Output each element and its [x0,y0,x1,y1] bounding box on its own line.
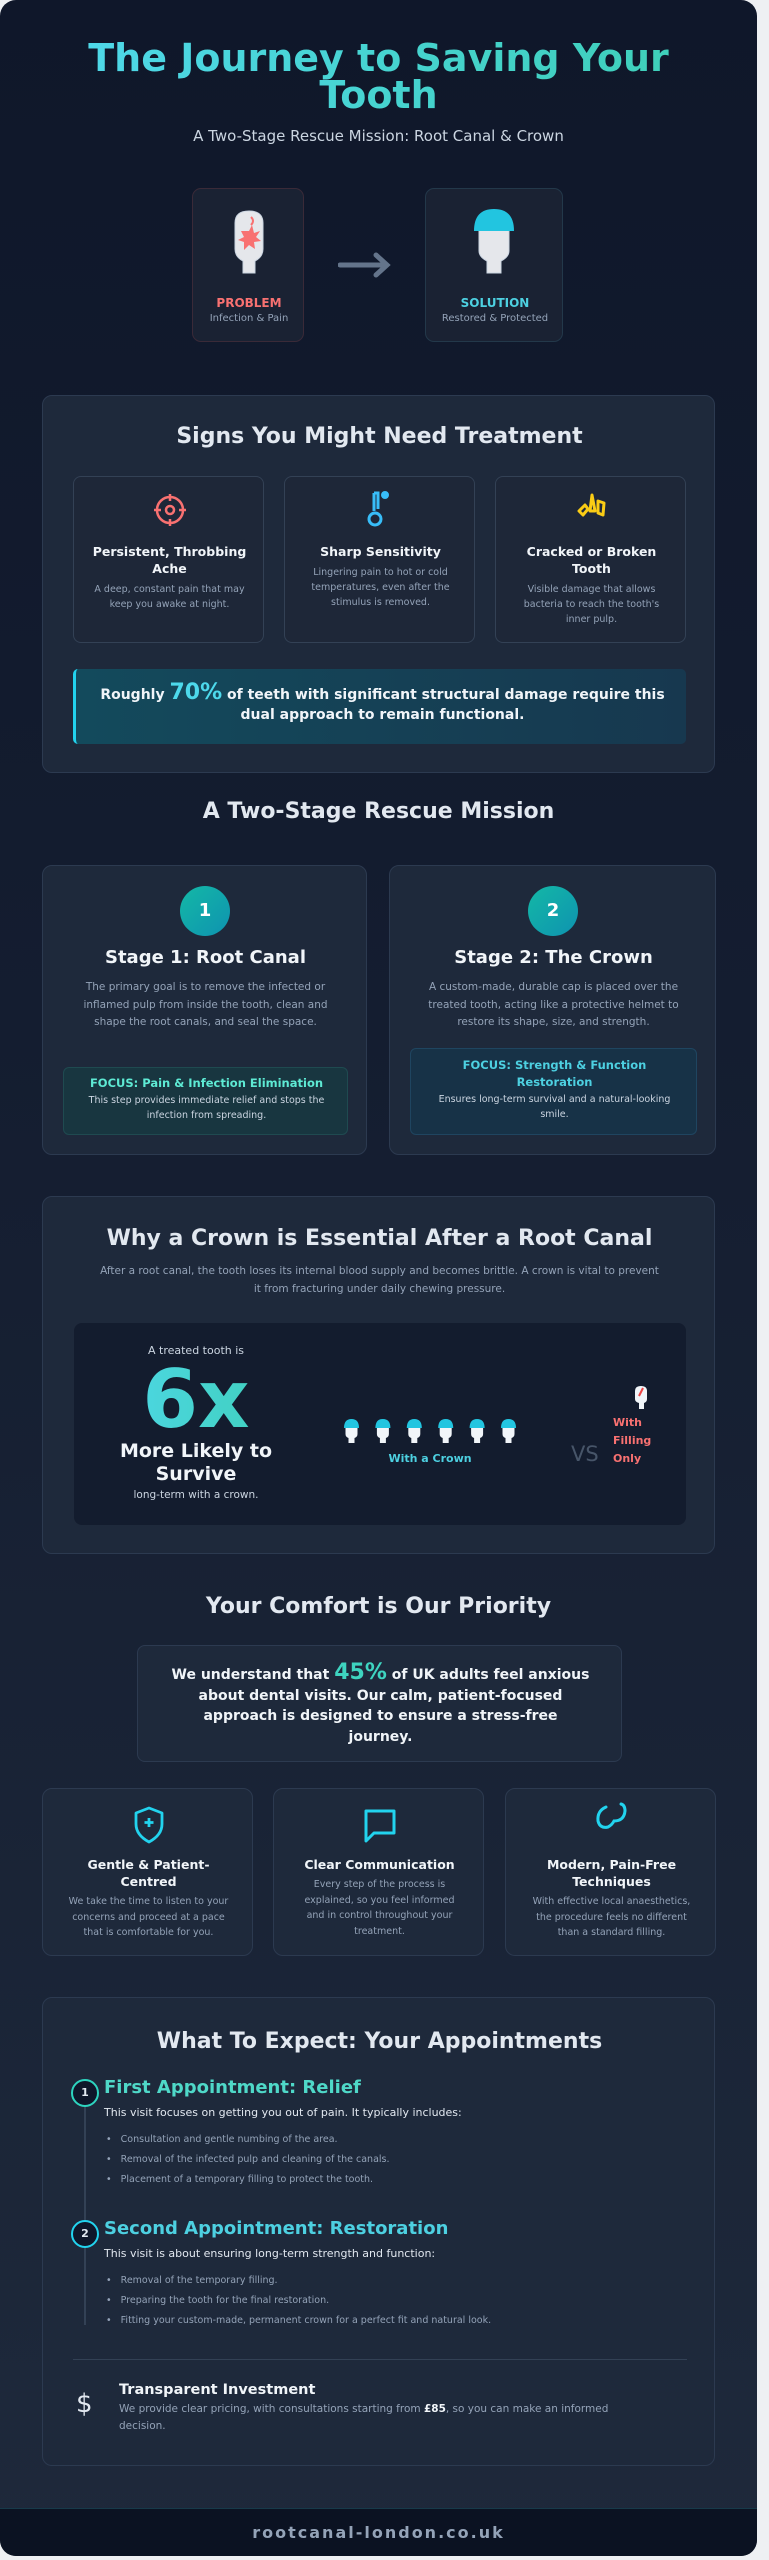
step 2: • Removal of the temporary filling. [106,2275,278,2286]
card: gentle: Gentle & Patient-Centred [87,1857,210,1889]
timeline line [84,2105,86,2325]
badge 1: 1 [199,900,211,921]
focus box 1: FOCUS: Pain & Infection Elimination [90,1076,323,1090]
focus box 2: FOCUS: Strength & Function Restoration [463,1058,646,1089]
stat box: With a Crown [388,1452,472,1465]
badge 2 [528,886,578,936]
focus box 2: Ensures long-term survival and a natural-looking smile. [439,1094,670,1120]
stat box: A treated tooth is [148,1344,244,1357]
callout: 70%: Roughly 70% of teeth with significant structural damage require this dual approach to remain functional. [100,680,665,723]
badge 2: 2 [547,900,559,921]
panel: appointments [42,1997,715,2466]
panel: why crown [42,1196,715,1554]
card: cracked [495,476,686,643]
vs: VS [571,1442,599,1466]
solution box [425,188,563,342]
heading: signs: Signs You Might Need Treatment [176,424,583,449]
panel: stage 2: Stage 2: The Crown [454,947,653,968]
step 1: First Appointment: Relief [104,2077,361,2098]
badge 1 [180,886,230,936]
footer: rootcanal-london.co.uk [252,2523,505,2542]
step 2 [71,2218,491,2326]
step 1: • Consultation and gentle numbing of the area. [106,2134,338,2145]
panel: stage 2: A custom-made, durable cap is placed over the treated tooth, acting like a protective helmet to restore its shape, size, and strength. [428,981,679,1028]
icon row: crowned teeth [344,1419,516,1443]
icon: filled tooth [635,1386,647,1409]
callout: 45% [137,1645,622,1762]
card: ache [73,476,264,643]
stat box [74,1323,686,1525]
heading: comfort: Your Comfort is Our Priority [206,1594,551,1619]
card: ache: Persistent, Throbbing Ache [93,544,246,576]
heading: two-stage: A Two-Stage Rescue Mission [203,799,554,824]
card: ache: A deep, constant pain that may keep you awake at night. [94,584,245,610]
panel: signs [42,395,715,773]
problem box: Infection & Pain [210,313,288,324]
subtitle: A Two-Stage Rescue Mission: Root Canal & Crown [193,127,564,145]
card: communication: Every step of the process is explained, so you feel informed and in control throughout your treatment. [304,1879,454,1936]
title: The Journey to Saving Your Tooth [88,36,669,117]
card: modern [505,1788,716,1956]
step 1: • Removal of the infected pulp and cleaning of the canals. [106,2154,390,2165]
icon: dollar: $ [76,2389,93,2419]
investment [76,2382,608,2432]
step 2: • Fitting your custom-made, permanent crown for a perfect fit and natural look. [106,2315,491,2326]
card: sensitivity: Lingering pain to hot or cold temperatures, even after the stimulus is removed. [311,567,450,608]
callout: 45%: We understand that 45% of UK adults feel anxious [172,1660,589,1685]
icon: crowned tooth [474,209,514,274]
stat: 6x: 6x [142,1353,250,1446]
panel: stage 2 [389,865,716,1155]
card: gentle [42,1788,253,1956]
label: solution: SOLUTION [461,296,529,310]
icon: curved tool [596,1802,626,1829]
stat box: long-term with a crown. [134,1489,258,1501]
step 1: • Placement of a temporary filling to protect the tooth. [106,2174,373,2185]
focus box 1: This step provides immediate relief and stops the infection from spreading. [89,1095,324,1121]
footer [0,2508,757,2556]
stat: 6x [94,1355,298,1445]
callout: 45%: about dental visits. Our calm, patient-focused [199,1688,562,1704]
icon: target [154,494,186,526]
step 1: 1 [81,2086,89,2099]
focus box 2 [410,1048,697,1135]
panel: appointments: What To Expect: Your Appointments [157,2029,602,2054]
step 2: This visit is about ensuring long-term strength and function: [104,2247,435,2260]
callout: 70% [73,669,686,744]
panel: why crown: After a root canal, the tooth loses its internal blood supply and becomes brittle. A crown is vital to prevent it from fracturing under daily chewing pressure. [100,1265,659,1295]
step 2: • Preparing the tooth for the final restoration. [106,2295,329,2306]
stat box: With Filling Only [613,1416,651,1465]
stat box: More Likely to Survive [120,1440,272,1485]
card: communication: Clear Communication [304,1857,455,1872]
card: gentle: We take the time to listen to your concerns and proceed at a pace that is comfortable for you. [69,1896,228,1938]
panel: why crown: Why a Crown is Essential After a Root Canal [107,1226,652,1251]
solution box: Restored & Protected [442,313,548,324]
icon: thermometer [368,491,389,526]
card: communication [273,1788,484,1956]
icon: infected tooth [234,210,264,274]
step 2: 2 [81,2227,89,2240]
panel: stage 1 [42,865,367,1155]
card: cracked: Visible damage that allows bacteria to reach the tooth's inner pulp. [524,584,659,625]
investment: Transparent Investment [119,2382,315,2398]
card: modern: With effective local anaesthetics, the procedure feels no different than a standard filling. [533,1896,690,1938]
callout: 45%: journey. [349,1728,412,1744]
icon: shield [134,1806,164,1844]
card: sensitivity [284,476,475,643]
icon: cracked tooth [577,494,606,517]
step 1: This visit focuses on getting you out of pain. It typically includes: [104,2106,462,2119]
card: cracked: Cracked or Broken Tooth [527,544,656,576]
arrow [338,252,390,278]
step 1 [71,2077,462,2185]
icon: speech bubble [364,1810,396,1843]
focus box 1 [63,1067,348,1135]
callout: 45%: approach is designed to ensure a stress-free [203,1708,558,1724]
panel: stage 1: The primary goal is to remove the infected or inflamed pulp from inside the tooth, clean and shape the root canals, and seal the space. [83,981,328,1028]
panel: stage 1: Stage 1: Root Canal [105,947,306,968]
card: sensitivity: Sharp Sensitivity [320,544,441,559]
problem box [192,188,304,342]
investment: We provide clear pricing, with consultations starting from £85, so you can make an informed decision. [119,2403,608,2432]
step 2: Second Appointment: Restoration [104,2218,448,2239]
card: modern: Modern, Pain-Free Techniques [547,1857,676,1889]
label: problem: PROBLEM [216,296,282,310]
